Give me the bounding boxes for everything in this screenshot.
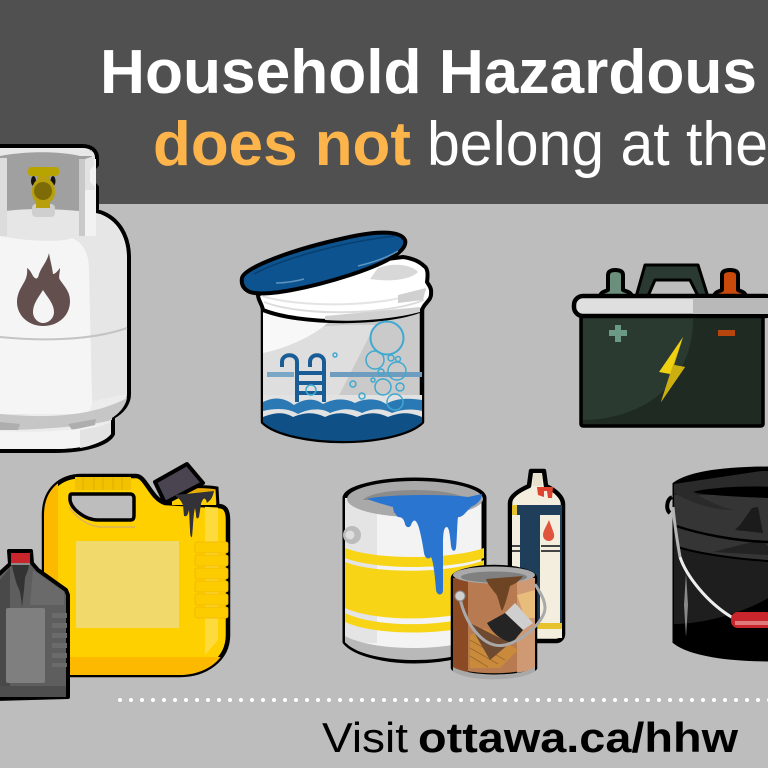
icon: motor oil bottle bbox=[0, 551, 68, 699]
cap bbox=[155, 464, 203, 503]
icon: lightning bolt bbox=[659, 337, 685, 402]
bucket lid bbox=[242, 233, 405, 293]
ribs bbox=[52, 613, 67, 667]
paint brush bbox=[487, 603, 533, 643]
drips bbox=[12, 565, 29, 607]
header band bbox=[0, 0, 768, 204]
icon: paint can bbox=[343, 480, 484, 662]
can handle opening bbox=[70, 494, 134, 520]
call to action bbox=[322, 714, 738, 761]
paint can lug bbox=[343, 526, 361, 544]
icon: car battery bbox=[574, 265, 768, 426]
bubbles bbox=[306, 322, 406, 410]
icon: valve bbox=[28, 167, 59, 217]
heading bbox=[100, 38, 768, 179]
bucket rim bbox=[258, 257, 431, 321]
heading: Household Hazardous bbox=[100, 38, 757, 107]
call to action: Visit bbox=[322, 714, 408, 761]
icon: propane cylinder bbox=[0, 146, 129, 451]
neck bbox=[165, 487, 218, 506]
ribs bbox=[195, 542, 228, 618]
red handle grip bbox=[731, 612, 768, 628]
battery lid bbox=[574, 296, 768, 316]
icon: black bucket bbox=[667, 468, 768, 660]
can bottom lip bbox=[453, 667, 535, 679]
icon: pool ladder bbox=[282, 355, 324, 402]
dotted divider bbox=[120, 698, 768, 702]
heading: does not bbox=[153, 110, 411, 179]
icon: spray can bbox=[510, 471, 563, 641]
icon: wood stain can with brush bbox=[453, 566, 545, 679]
stain drip bbox=[486, 576, 523, 611]
icon: pool chemical bucket bbox=[242, 233, 431, 445]
terminals bbox=[600, 270, 746, 297]
icon: yellow jerry can bbox=[44, 464, 228, 677]
collar posts bbox=[79, 159, 96, 236]
call to action: ottawa.ca/hhw bbox=[418, 714, 738, 761]
small can rim bbox=[453, 566, 535, 584]
cap bbox=[11, 553, 30, 563]
yellow bands bbox=[345, 548, 484, 567]
collar interior bbox=[0, 150, 92, 212]
minus sign bbox=[718, 330, 735, 336]
label bbox=[6, 608, 45, 683]
battery case bbox=[581, 312, 763, 426]
label bbox=[76, 541, 179, 628]
rim bbox=[347, 481, 483, 517]
seam bbox=[0, 328, 127, 339]
cylinder front highlight bbox=[0, 236, 92, 414]
plus sign bbox=[609, 325, 627, 342]
handle bbox=[636, 265, 708, 297]
base shading bbox=[0, 398, 127, 430]
icon: flame bbox=[17, 253, 70, 326]
wire handle bbox=[673, 507, 680, 557]
wire handle bbox=[460, 584, 545, 646]
oil drips bbox=[175, 491, 214, 537]
shoulder bbox=[0, 209, 127, 420]
